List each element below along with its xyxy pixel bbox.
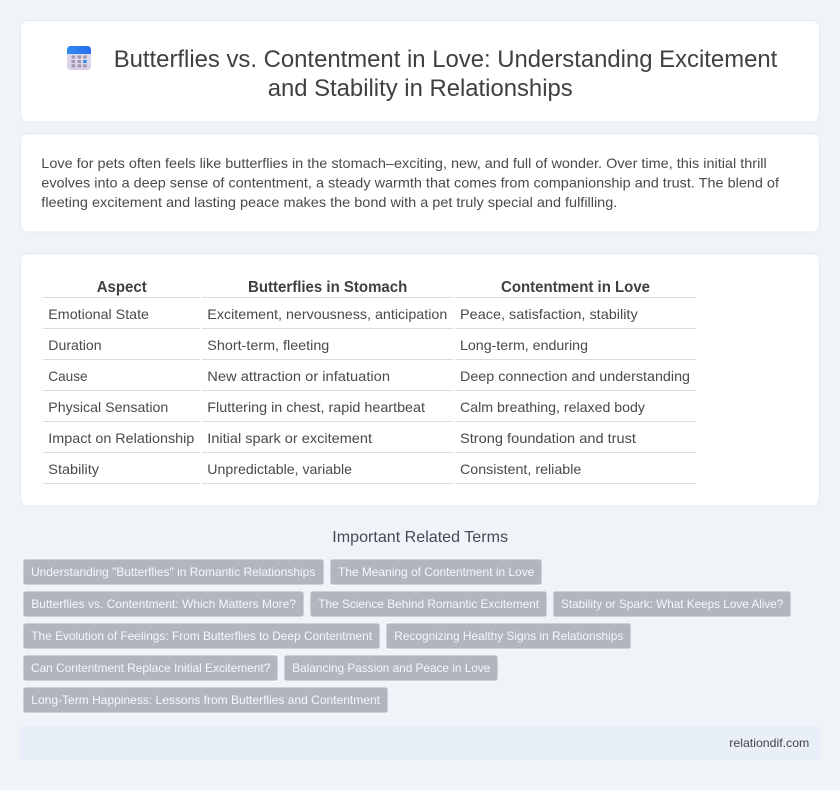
table row: impact on relationship: Strong foundation and trust <box>460 430 636 446</box>
chip <box>24 560 324 584</box>
chip: The Science Behind Romantic Excitement <box>318 597 540 611</box>
panel: title card <box>20 20 820 122</box>
chip <box>554 592 790 616</box>
table row: duration <box>48 337 588 353</box>
chip: Stability or Spark: What Keeps Love Alive? <box>561 597 784 611</box>
title <box>114 46 778 102</box>
table row: impact on relationship <box>48 430 636 446</box>
table row: cause: Cause <box>48 368 88 384</box>
chip: Butterflies vs. Contentment: Which Matters More? <box>31 597 296 611</box>
table header <box>97 279 650 296</box>
icon: calendar <box>67 46 91 70</box>
chip: Can Contentment Replace Initial Excitement? <box>31 661 271 675</box>
table row: impact on relationship: Impact on Relationship <box>48 430 195 446</box>
table row: cause <box>48 368 690 384</box>
chip <box>284 656 498 680</box>
table header: Aspect <box>97 279 147 296</box>
table row: stability: Stability <box>48 461 99 477</box>
table header: Butterflies in Stomach <box>248 279 407 296</box>
table row: impact on relationship: Initial spark or excitement <box>207 430 372 446</box>
chip <box>24 656 278 680</box>
table row: physical sensation: Fluttering in chest, rapid heartbeat <box>207 399 425 415</box>
table row: cause: New attraction or infatuation <box>207 368 390 384</box>
chip: Long-Term Happiness: Lessons from Butterflies and Contentment <box>31 693 381 707</box>
chip <box>24 688 388 712</box>
text block: intro <box>41 155 779 210</box>
table row: emotional state: Emotional State <box>48 306 149 322</box>
table row: physical sensation: Physical Sensation <box>48 399 168 415</box>
chip <box>386 624 630 648</box>
table row: duration: Duration <box>48 337 102 353</box>
table row: cause: Deep connection and understanding <box>460 368 690 384</box>
table row: duration: Short-term, fleeting <box>207 337 329 353</box>
table row: stability <box>48 461 582 477</box>
chip <box>24 592 304 616</box>
table row: physical sensation <box>48 399 645 415</box>
panel: related term chips <box>24 560 790 712</box>
chip: The Meaning of Contentment in Love <box>338 565 535 579</box>
chip: The Evolution of Feelings: From Butterflies to Deep Contentment <box>31 629 373 643</box>
table row: emotional state: Peace, satisfaction, stability <box>460 306 638 322</box>
text block: intro: Love for pets often feels like butterflies in the stomach–exciting, new, and full of wonder. Over time, this initial thrill <box>41 155 767 171</box>
panel: intro paragraph <box>20 134 820 232</box>
chip: Balancing Passion and Peace in Love <box>292 661 491 675</box>
heading: important related terms: Important Related Terms <box>332 529 508 546</box>
footer <box>20 726 820 760</box>
text block: intro: fleeting excitement and lasting peace makes the bond with a pet truly special and fulfilling. <box>41 194 617 210</box>
title: and Stability in Relationships <box>268 75 573 102</box>
chip: Understanding "Butterflies" in Romantic Relationships <box>31 565 315 579</box>
table header: Contentment in Love <box>501 279 650 296</box>
text block: intro: evolves into a deep sense of contentment, a steady warmth that comes from companionship and trust. The blend of <box>41 174 779 190</box>
table row: stability: Unpredictable, variable <box>207 461 352 477</box>
table row: stability: Consistent, reliable <box>460 461 582 477</box>
table row: emotional state: Excitement, nervousness, anticipation <box>207 306 447 322</box>
panel: comparison table <box>20 254 820 506</box>
chip <box>24 624 380 648</box>
chip: Recognizing Healthy Signs in Relationships <box>394 629 623 643</box>
footer: relationdif.com <box>729 736 809 750</box>
table row: duration: Long-term, enduring <box>460 337 588 353</box>
table row: physical sensation: Calm breathing, relaxed body <box>460 399 645 415</box>
table row: emotional state <box>48 306 638 322</box>
chip <box>330 560 542 584</box>
title: Butterflies vs. Contentment in Love: Understanding Excitement <box>114 46 778 73</box>
chip <box>310 592 546 616</box>
